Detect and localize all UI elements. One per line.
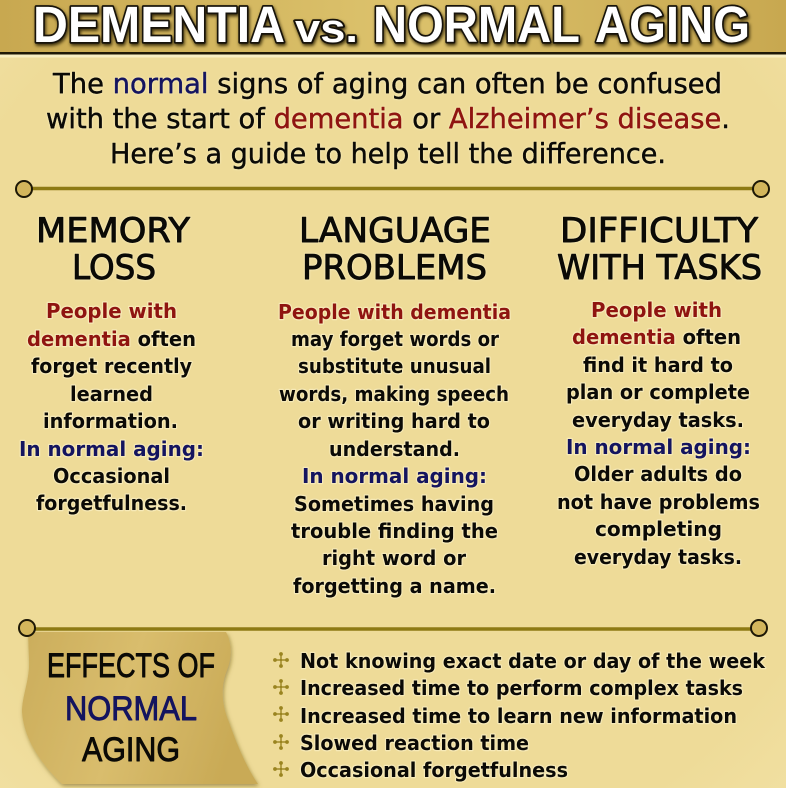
text: language problems description: substitute unusual bbox=[298, 354, 491, 378]
title banner bbox=[0, 0, 786, 58]
text: memory loss description: forget recently bbox=[31, 354, 192, 378]
item: reaction time: Slowed reaction time bbox=[300, 731, 529, 755]
heading: memory loss bbox=[36, 211, 190, 288]
item: complex tasks: Increased time to perform complex tasks bbox=[300, 676, 743, 700]
text: difficulty with tasks description: People with bbox=[591, 298, 722, 322]
text: memory loss description bbox=[19, 299, 204, 515]
text: memory loss description: information. bbox=[43, 409, 178, 433]
text: memory loss description: forgetfulness. bbox=[36, 491, 187, 515]
panel: memory loss bbox=[19, 211, 204, 515]
text: difficulty with tasks description: Older adults do bbox=[574, 462, 742, 486]
text: language problems description: People with dementia bbox=[278, 300, 511, 324]
text: difficulty with tasks description: plan or complete bbox=[566, 380, 750, 404]
item: exact date: Not knowing exact date or day of the week bbox=[300, 649, 766, 673]
text: language problems description: right word or bbox=[322, 546, 466, 570]
list: effects of normal aging bbox=[273, 649, 766, 782]
panel: difficulty with tasks bbox=[557, 211, 762, 569]
text: language problems description: In normal aging: bbox=[302, 464, 487, 488]
text: language problems description: understand. bbox=[329, 437, 460, 461]
text: language problems description: trouble finding the bbox=[291, 519, 498, 543]
heading: language problems: LANGUAGE bbox=[299, 211, 491, 251]
heading: language problems bbox=[299, 211, 491, 288]
heading: memory loss: MEMORY bbox=[36, 211, 190, 251]
text: language problems description: or writing hard to bbox=[298, 409, 490, 433]
intro text: The normal signs of aging can often be confused bbox=[52, 67, 722, 100]
heading: difficulty with tasks: WITH TASKS bbox=[557, 248, 762, 288]
text: language problems description: Sometimes having bbox=[294, 492, 494, 516]
text: difficulty with tasks description: completing bbox=[595, 517, 722, 541]
title banner: vs. bbox=[295, 7, 358, 51]
bottom divider bbox=[19, 620, 767, 636]
item: occasional forgetfulness: Occasional forgetfulness bbox=[300, 758, 568, 782]
text: difficulty with tasks description: find it hard to bbox=[583, 353, 733, 377]
text: memory loss description: In normal aging: bbox=[19, 437, 204, 461]
heading: difficulty with tasks bbox=[557, 211, 762, 288]
text: language problems description bbox=[278, 300, 511, 598]
text: difficulty with tasks description: dementia often bbox=[572, 325, 741, 349]
heading: memory loss: LOSS bbox=[72, 248, 156, 288]
text: language problems description: may forget words or bbox=[291, 327, 499, 351]
intro text: with the start of dementia or Alzheimer’s disease. bbox=[46, 102, 730, 135]
text: difficulty with tasks description bbox=[557, 298, 760, 569]
text: memory loss description: Occasional bbox=[53, 464, 170, 488]
intro text: Here’s a guide to help tell the difference. bbox=[110, 137, 666, 170]
panel: language problems bbox=[278, 211, 511, 598]
text: difficulty with tasks description: not have problems bbox=[557, 490, 760, 514]
heading: language problems: PROBLEMS bbox=[302, 248, 487, 288]
panel: effects of normal aging banner: EFFECTS OF bbox=[47, 647, 215, 685]
top divider bbox=[16, 181, 769, 197]
text: memory loss description: dementia often bbox=[27, 327, 196, 351]
intro text bbox=[46, 67, 730, 170]
panel: effects of normal aging banner: NORMAL bbox=[65, 690, 197, 728]
item: new information: Increased time to learn new information bbox=[300, 704, 737, 728]
text: difficulty with tasks description: everyday tasks. bbox=[574, 545, 742, 569]
text: memory loss description: learned bbox=[70, 382, 153, 406]
text: language problems description: words, making speech bbox=[279, 382, 509, 406]
text: difficulty with tasks description: everyday tasks. bbox=[572, 408, 744, 432]
panel: effects of normal aging banner bbox=[22, 632, 258, 784]
text: language problems description: forgetting a name. bbox=[293, 574, 496, 598]
heading: difficulty with tasks: DIFFICULTY bbox=[560, 211, 758, 251]
panel: effects of normal aging banner: AGING bbox=[82, 731, 180, 769]
text: difficulty with tasks description: In normal aging: bbox=[566, 435, 751, 459]
text: memory loss description: People with bbox=[46, 299, 177, 323]
